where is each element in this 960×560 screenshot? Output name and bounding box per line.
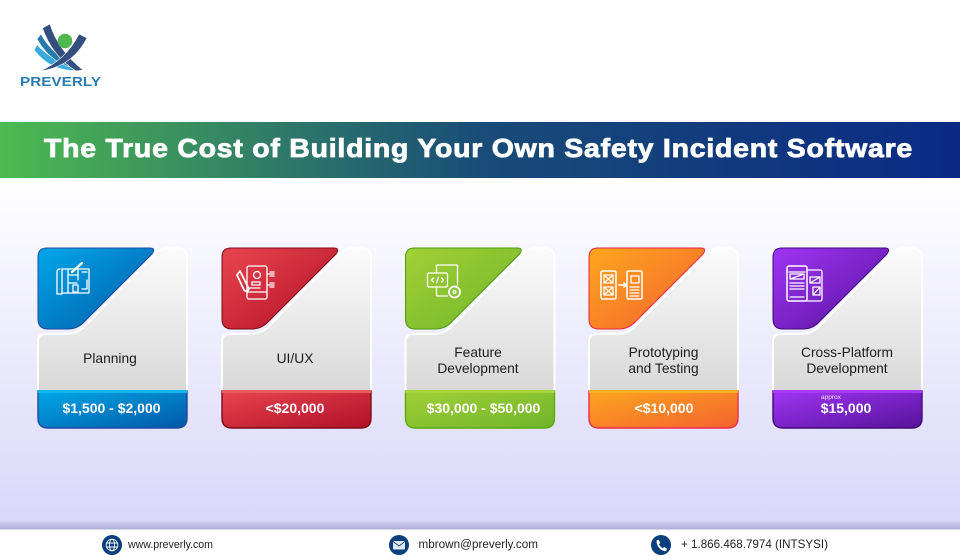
icon: wireframe to screen	[601, 271, 642, 299]
price bar	[773, 390, 922, 428]
icon: globe	[102, 535, 122, 555]
label: Prototyping	[629, 345, 698, 360]
footer: phone	[651, 535, 828, 555]
label: Planning	[83, 351, 137, 366]
card: Planning	[38, 248, 187, 428]
price bar: $1,500 - $2,000	[62, 400, 161, 416]
icon: phone design	[237, 266, 274, 299]
card: Cross-Platform Development	[773, 248, 922, 428]
icon panel	[222, 248, 338, 329]
card: Prototyping and Testing	[589, 248, 738, 428]
icon panel	[38, 248, 154, 329]
icon panel	[589, 248, 705, 329]
title: The True Cost of Building Your Own Safety Incident Software	[44, 133, 913, 163]
title band	[0, 122, 960, 178]
footer: phone: + 1.866.468.7974 (INTSYSI)	[681, 538, 828, 551]
icon: phone and tablet layouts	[787, 266, 822, 301]
icon panel	[773, 248, 889, 329]
price bar	[406, 390, 554, 428]
price bar: <$20,000	[266, 400, 325, 416]
price bar: <$10,000	[635, 400, 694, 416]
footer: website	[102, 535, 213, 555]
label: Cross-Platform	[801, 345, 893, 360]
price bar: $30,000 - $50,000	[427, 400, 541, 416]
card: Prototyping and Testing: and Testing	[628, 361, 699, 376]
price bar	[589, 390, 738, 428]
icon panel	[406, 248, 521, 329]
footer: email	[389, 535, 538, 555]
logo: Preverly	[20, 24, 102, 89]
card: UI/UX	[222, 248, 371, 428]
price bar: $15,000	[821, 400, 872, 416]
card: Feature Development	[406, 248, 554, 428]
icon: floor plan	[57, 263, 89, 294]
label: Feature	[454, 345, 502, 360]
label: UI/UX	[277, 351, 313, 366]
footer: website: www.preverly.com	[127, 539, 213, 551]
price bar: approx	[821, 394, 842, 401]
icon: envelope	[389, 535, 409, 555]
page background	[0, 178, 960, 524]
price bar	[38, 390, 187, 428]
icon: code and gear	[428, 265, 460, 298]
card: Cross-Platform Development: Development	[806, 361, 888, 376]
footer: email: mbrown@preverly.com	[418, 539, 538, 551]
icon: phone handset	[651, 535, 671, 555]
card: Feature Development: Development	[437, 361, 519, 376]
logo: Preverly: PREVERLY	[20, 75, 102, 89]
price bar	[222, 390, 371, 428]
